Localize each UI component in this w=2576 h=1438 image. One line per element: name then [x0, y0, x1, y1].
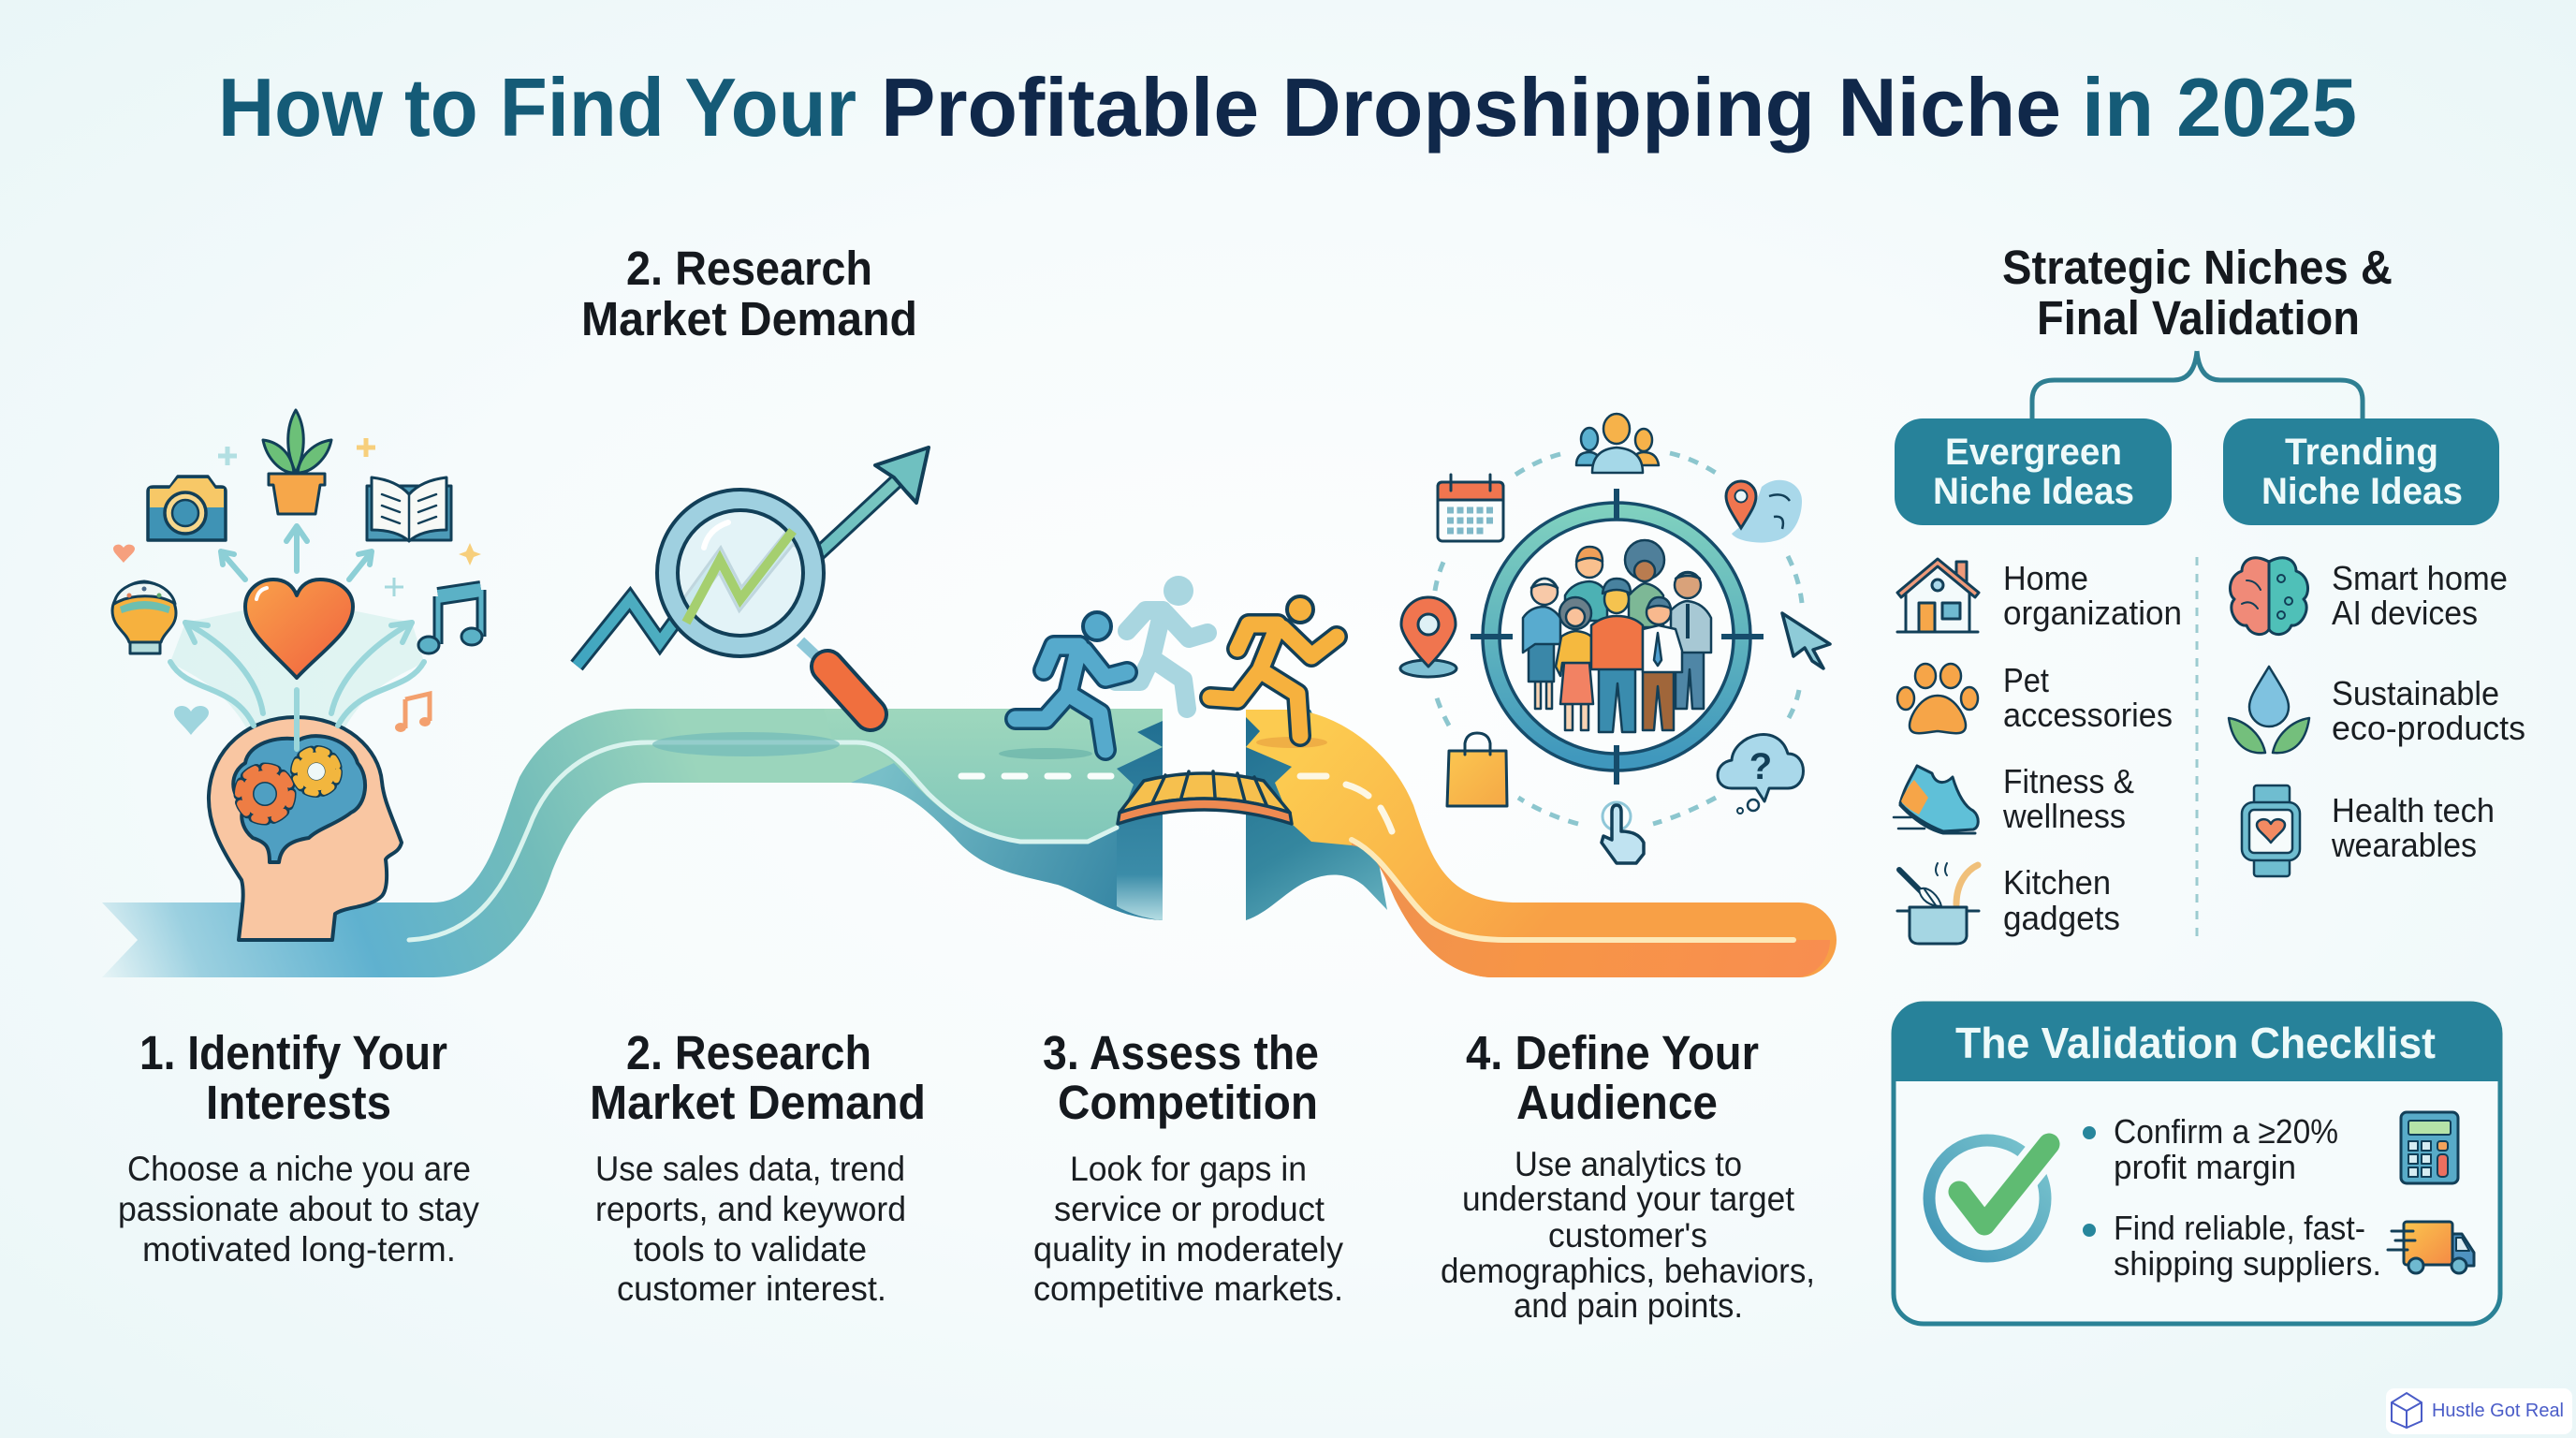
journey road ribbon: [102, 709, 1837, 977]
runner ghost: [1116, 576, 1208, 709]
icon: camera: [148, 477, 226, 540]
niche: sustainable eco-products: Sustainable: [2332, 674, 2499, 712]
niche: pet accessories: [1897, 661, 2173, 734]
icon: head with brain and gears: [170, 526, 424, 940]
niche: home organization: organization: [2003, 594, 2182, 632]
watermark: [2386, 1388, 2572, 1434]
icon: house: [1897, 559, 1979, 632]
panel: validation checklist: [1894, 1004, 2500, 1324]
icon: brain: [2230, 558, 2308, 635]
icon: cube logo: [2392, 1393, 2422, 1428]
step 2 text: reports, and keyword: [595, 1190, 906, 1228]
niche: smart home ai devices: [2230, 558, 2508, 635]
heading: research market demand (upper): [581, 242, 917, 345]
step 2 text: Use sales data, trend: [595, 1150, 905, 1188]
gear yellow: [295, 750, 338, 793]
step 1 text: [118, 1026, 479, 1269]
icon: central heart: [245, 580, 353, 678]
icon: cursor: [1782, 613, 1830, 668]
runner blue: [1016, 612, 1127, 750]
step 1 text: Interests: [206, 1076, 391, 1129]
step 2 text: 2. Research: [626, 1026, 871, 1079]
checklist title: The Validation Checklist: [1955, 1019, 2436, 1067]
item: profit margin: Confirm a ≥20%: [2114, 1112, 2338, 1151]
niche: home organization: Home: [2003, 559, 2088, 597]
pill: trending niche ideas: Niche Ideas: [2261, 471, 2463, 512]
icon: potted plant: [263, 410, 331, 514]
heading: research market demand (upper): 2. Research: [626, 242, 872, 295]
icon: pin with map cloud: [1726, 480, 1802, 543]
niche: pet accessories: Pet: [2003, 661, 2049, 699]
item: profit margin: profit margin: [2114, 1148, 2296, 1186]
item: reliable suppliers: [2083, 1209, 2381, 1283]
step 3 text: quality in moderately: [1033, 1230, 1343, 1269]
niche: kitchen gadgets: [1897, 863, 2120, 944]
step 3 text: 3. Assess the: [1043, 1026, 1319, 1079]
step 4 text: customer's: [1548, 1216, 1707, 1255]
niche: smart home ai devices: AI devices: [2332, 594, 2478, 632]
icon: question cloud: ?: [1749, 746, 1772, 787]
step 3 text: [1033, 1026, 1343, 1308]
bracket connector: [2032, 351, 2363, 418]
step 4 text: understand your target: [1462, 1180, 1795, 1218]
niche: kitchen gadgets: gadgets: [2003, 899, 2120, 937]
heading: strategic niches: Final Validation: [2037, 291, 2360, 345]
icon: pot with whisk: [1897, 863, 1979, 944]
step 4 text: and pain points.: [1514, 1286, 1743, 1325]
step 2 text: Market Demand: [590, 1076, 926, 1129]
step 2 text: tools to validate: [634, 1230, 867, 1269]
step 4 text: demographics, behaviors,: [1441, 1252, 1815, 1290]
icon: open book: [367, 477, 451, 541]
icon: bridge over gap: [1118, 771, 1292, 824]
icon: location pin: [1400, 597, 1456, 677]
step 3 text: competitive markets.: [1033, 1269, 1343, 1308]
icon: pointing hand: [1602, 802, 1644, 863]
step 4 text: [1441, 1026, 1815, 1325]
item: profit margin: [2083, 1112, 2338, 1186]
icon: running shoe: [1894, 766, 1978, 833]
step 1 text: Choose a niche you are: [127, 1150, 471, 1188]
step 1 text: passionate about to stay: [118, 1190, 479, 1228]
icon: check mark in circle: [1929, 1140, 2049, 1256]
icon: small decorations: [113, 438, 481, 735]
runner orange: [1210, 596, 1337, 736]
step 4 text: Audience: [1516, 1076, 1718, 1129]
icon: calculator: [2401, 1112, 2458, 1183]
niche: fitness and wellness: [1894, 762, 2134, 835]
niche: health tech wearables: wearables: [2331, 826, 2477, 864]
niche: fitness and wellness: Fitness &: [2003, 762, 2134, 800]
niche: kitchen gadgets: Kitchen: [2003, 863, 2111, 902]
heading: strategic niches: [2002, 241, 2393, 345]
pill: evergreen niche ideas: [1895, 418, 2172, 525]
icon: music notes: [418, 590, 482, 653]
item: reliable suppliers: Find reliable, fast-: [2114, 1209, 2365, 1247]
title: in 2025: [2082, 61, 2357, 154]
title: Profitable Dropshipping Niche: [881, 61, 2061, 154]
heading: strategic niches: Strategic Niches &: [2002, 241, 2393, 294]
icon: magnifier with growth chart: [577, 448, 929, 714]
title: How to Find Your: [218, 61, 856, 154]
niche: sustainable eco-products: eco-products: [2332, 709, 2525, 747]
audience target: [1400, 414, 1830, 863]
step 4 text: 4. Define Your: [1466, 1026, 1759, 1079]
pill: trending niche ideas: [2223, 418, 2499, 525]
step 3 text: Look for gaps in: [1070, 1150, 1307, 1188]
dashed orbit: [1435, 453, 1802, 824]
icon: paw: [1897, 664, 1978, 733]
icon: runners: [1016, 576, 1337, 750]
audience group of people: [1523, 540, 1711, 732]
pill: evergreen niche ideas: Evergreen: [1945, 432, 2122, 473]
niche: fitness and wellness: wellness: [2002, 797, 2126, 835]
icon: water drop with leaves: [2229, 667, 2309, 753]
icon: question cloud: [1718, 735, 1803, 814]
icon: smartwatch: [2242, 785, 2300, 876]
step 2 text: customer interest.: [617, 1269, 886, 1308]
watermark: Hustle Got Real: [2432, 1401, 2564, 1421]
target ring: [1471, 489, 1764, 785]
pill: trending niche ideas: Trending: [2285, 432, 2438, 473]
title: [218, 61, 2357, 154]
item: reliable suppliers: shipping suppliers.: [2114, 1244, 2381, 1283]
step 1 text: 1. Identify Your: [139, 1026, 447, 1079]
pill: evergreen niche ideas: Niche Ideas: [1933, 471, 2134, 512]
niche: pet accessories: accessories: [2003, 696, 2173, 734]
icon: calendar: [1438, 475, 1503, 541]
step 3 text: Competition: [1058, 1076, 1318, 1129]
gear orange: [239, 768, 291, 820]
niche: sustainable eco-products: [2229, 667, 2525, 753]
step 4 text: Use analytics to: [1515, 1145, 1742, 1183]
icon: shopping bag: [1447, 733, 1507, 806]
icon: light bulb palette: [112, 581, 176, 653]
icon: people trio: [1576, 414, 1659, 473]
step 3 text: service or product: [1054, 1190, 1325, 1228]
niche: home organization: [1897, 559, 2182, 632]
step 2 text: [590, 1026, 926, 1308]
niche: smart home ai devices: Smart home: [2332, 559, 2508, 597]
step 1 text: motivated long-term.: [142, 1230, 456, 1269]
heading: research market demand (upper): Market Demand: [581, 292, 917, 345]
icon: delivery truck: [2388, 1222, 2474, 1273]
niche: health tech wearables: Health tech: [2332, 791, 2495, 829]
niche: health tech wearables: [2242, 785, 2495, 876]
